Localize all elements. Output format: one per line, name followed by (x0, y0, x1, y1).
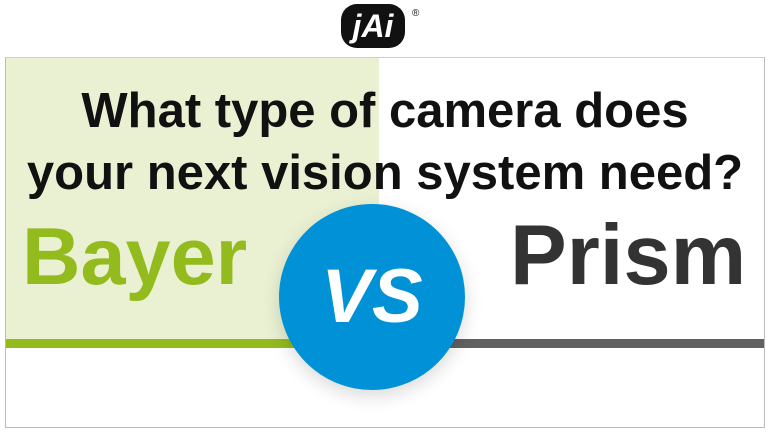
green line (6, 339, 379, 348)
label: Bayer: Bayer (22, 212, 247, 302)
bayer background (6, 58, 379, 341)
title: your next vision system need? (27, 146, 743, 200)
logo: jAi (349, 8, 395, 44)
label: Prism: Prism (510, 208, 746, 303)
logo (341, 4, 420, 48)
title (27, 84, 743, 200)
title: What type of camera does (81, 84, 689, 138)
vs circle: VS (321, 254, 423, 339)
logo: ® (412, 8, 420, 19)
vs circle (279, 204, 465, 390)
grey line (379, 339, 764, 348)
